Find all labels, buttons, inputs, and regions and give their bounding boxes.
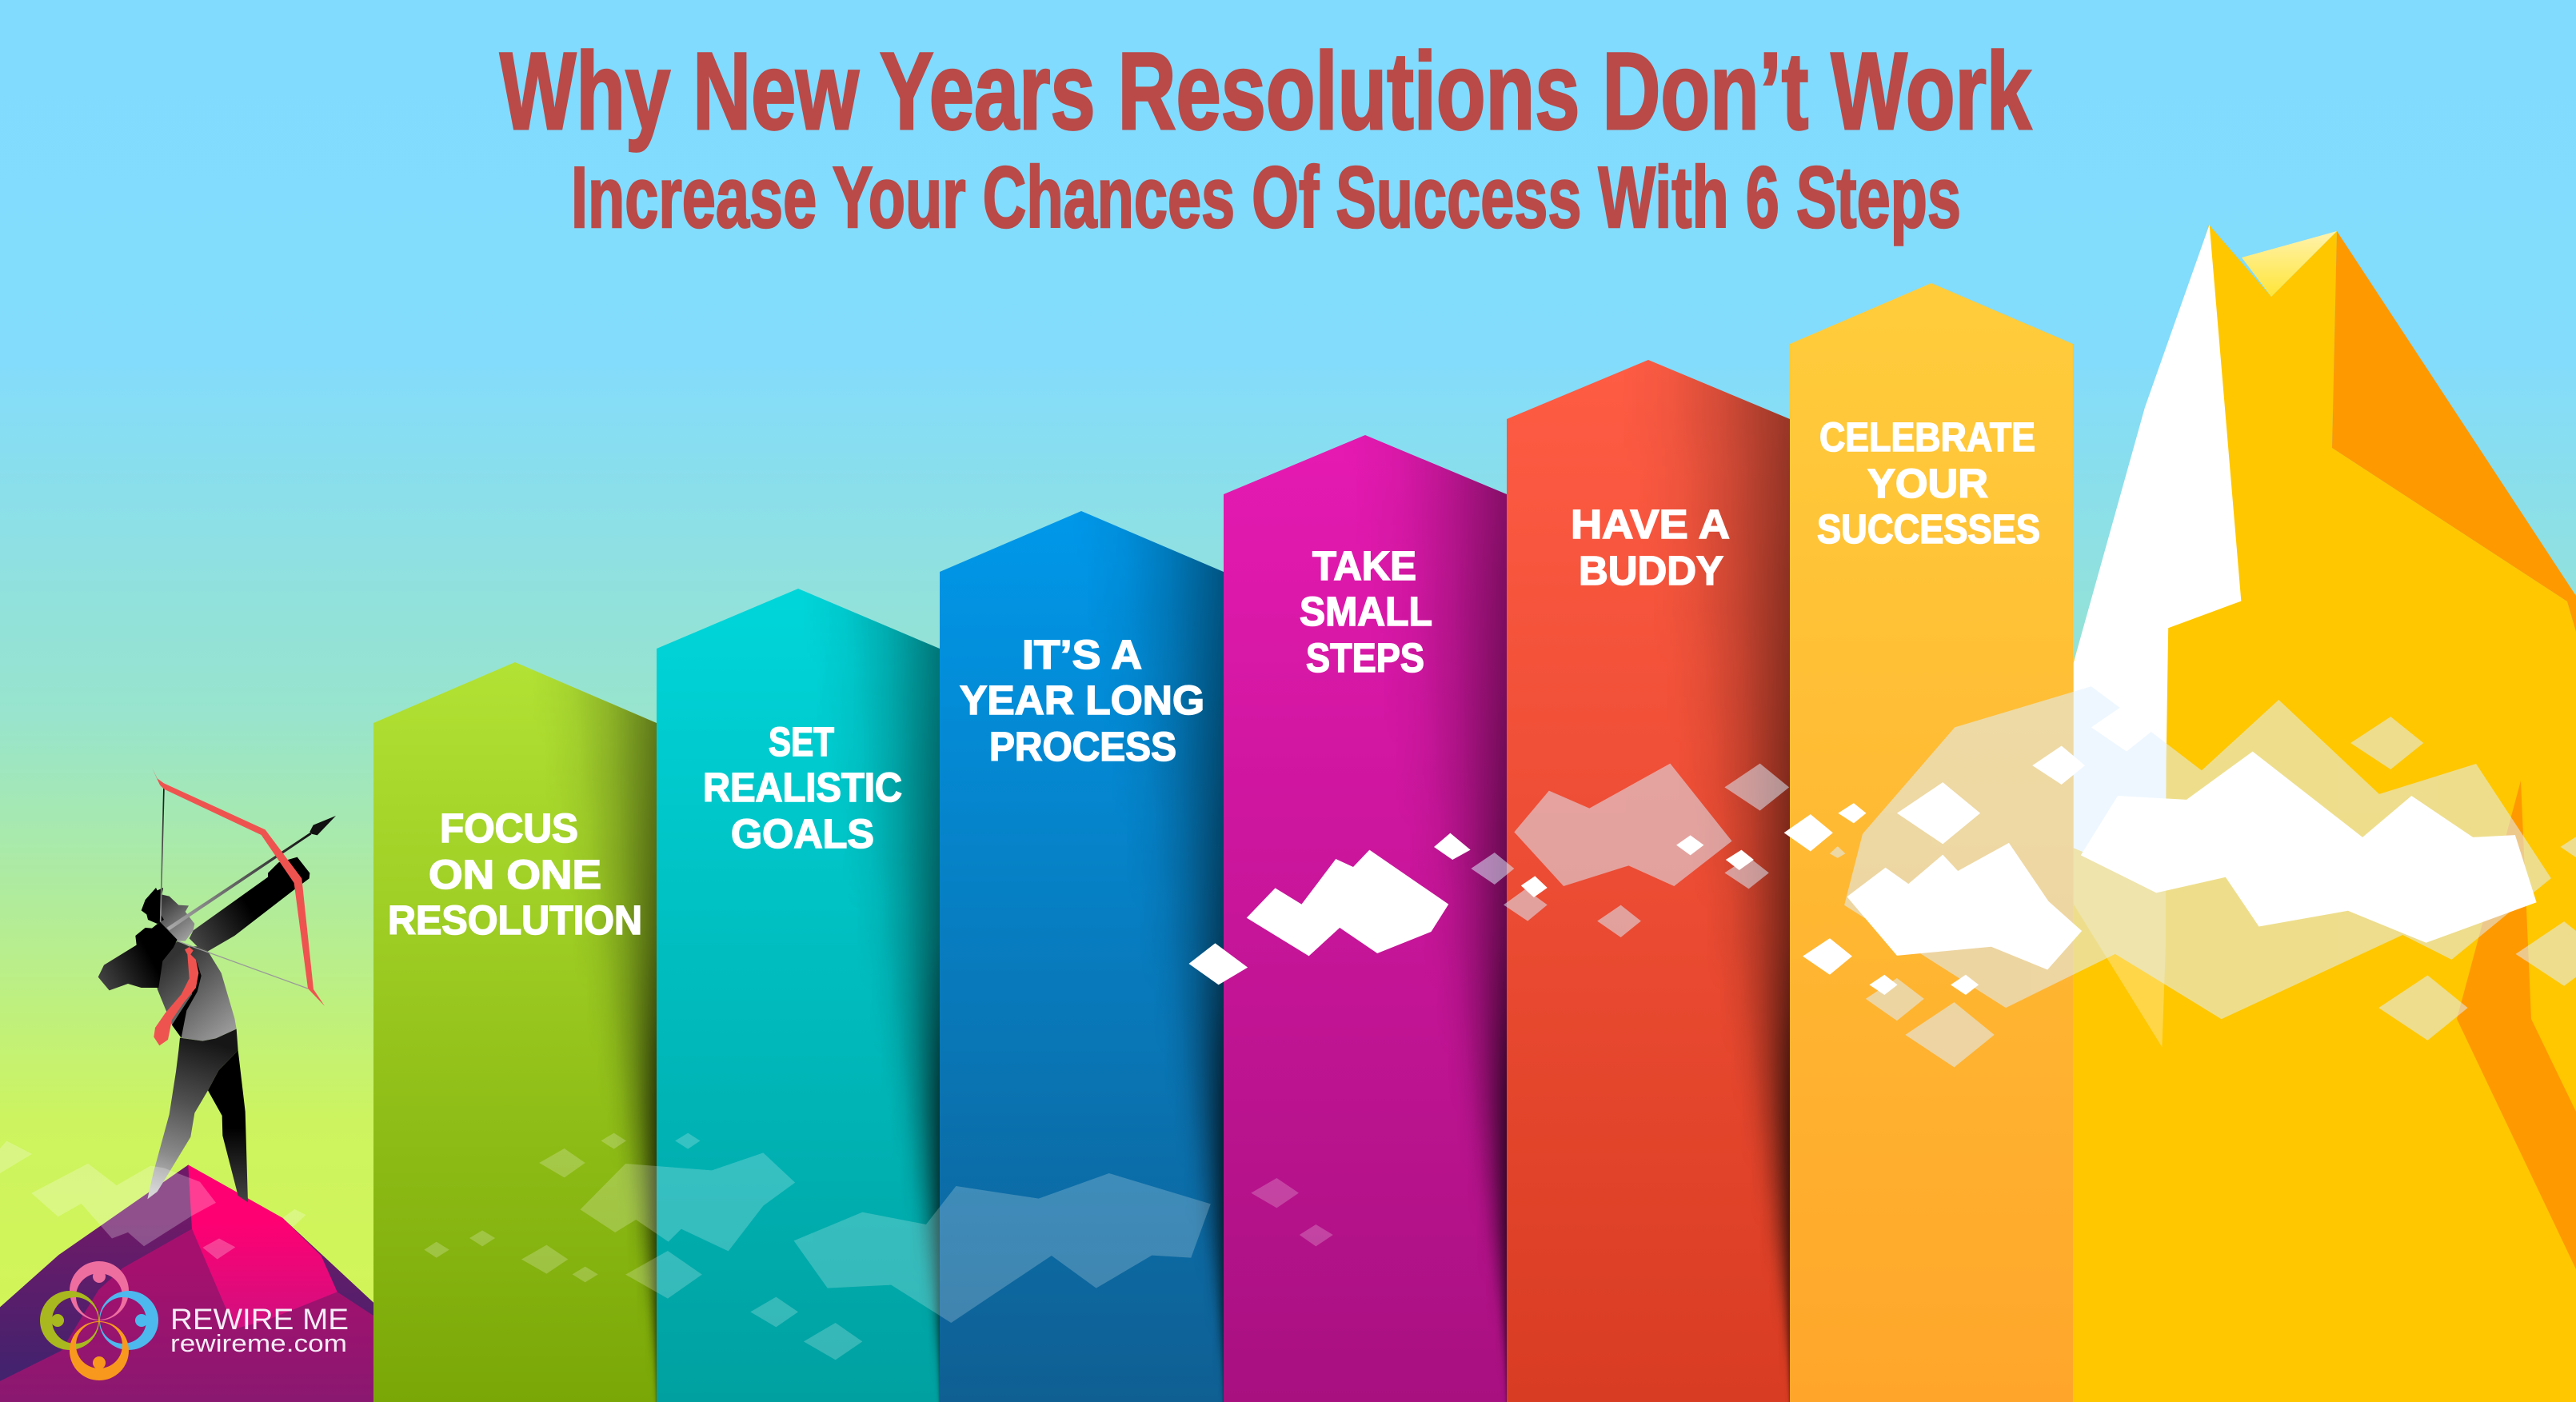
main title: Why New Years Resolutions Don’t Work (500, 30, 2032, 153)
white cloud and diamonds (1188, 833, 1754, 985)
translucent mist on the summit (0, 1141, 306, 1260)
translucent cloud and diamonds (1471, 764, 1789, 937)
step label: have a buddy: HAVE A (1571, 501, 1730, 547)
step label: focus on one resolution (388, 805, 642, 943)
faint clouds on columns 1 to 4 (424, 1133, 1333, 1360)
title block (500, 30, 2032, 246)
step label: have a buddy: BUDDY (1579, 548, 1723, 593)
tie (154, 947, 198, 1045)
magenta lower facet (0, 1228, 374, 1402)
drawing arm (98, 922, 178, 990)
head and hair (157, 894, 194, 941)
step label: take small steps: STEPS (1306, 635, 1424, 681)
torso (158, 941, 237, 1041)
logo ring blue (99, 1291, 158, 1350)
column 1 (373, 662, 657, 1402)
archer businessman with bow (98, 768, 336, 1202)
logo: Rewire Me (40, 1261, 349, 1380)
step label: it's a year long process: YEAR LONG (960, 677, 1204, 723)
logo ring orange (70, 1321, 129, 1380)
mountain body (2073, 225, 2576, 1402)
column 4 (1224, 435, 1507, 1402)
step label: celebrate your successes: YOUR (1867, 461, 1988, 506)
arrow (166, 816, 336, 930)
logo ring green (40, 1291, 99, 1350)
right mountain (2073, 225, 2576, 1402)
step label: it's a year long process (960, 632, 1204, 769)
step columns (373, 240, 2073, 1402)
step label: celebrate your successes (1817, 414, 2040, 552)
bow strings (161, 785, 308, 989)
white clouds (1784, 746, 2537, 995)
step label: set realistic goals: REALISTIC (703, 765, 902, 810)
step label: focus on one resolution: RESOLUTION (388, 897, 642, 943)
step label: take small steps: TAKE (1312, 543, 1416, 589)
bow (152, 768, 325, 1006)
purple back facet (0, 1165, 373, 1402)
white snow face (2074, 225, 2241, 887)
step label: focus on one resolution: ON ONE (429, 852, 601, 897)
subtitle: Increase Your Chances Of Success With 6 Steps (571, 149, 1961, 246)
step label: celebrate your successes: CELEBRATE (1819, 414, 2035, 460)
left mountain (0, 1165, 374, 1402)
step label: set realistic goals (703, 719, 902, 857)
column 3 (940, 511, 1224, 1402)
logo url: rewireme.com (170, 1329, 347, 1357)
clouds on columns 4 and 5 (1188, 764, 1789, 985)
logo ring pink (70, 1261, 129, 1320)
rear leg (208, 1050, 248, 1202)
snow-lit facet (2242, 231, 2337, 297)
step label: it's a year long process: IT’S A (1022, 632, 1142, 677)
pink summit facet (188, 1165, 337, 1329)
shadow under tie (172, 960, 202, 1038)
step label: celebrate your successes: SUCCESSES (1817, 506, 2040, 552)
column 2 (657, 589, 940, 1402)
logo wordmark: REWIRE ME (170, 1303, 349, 1336)
column 5 (1507, 360, 1790, 1402)
step label: set realistic goals: SET (769, 719, 834, 765)
extended arm (190, 857, 310, 951)
faint snow base (2074, 848, 2166, 1047)
column 6 (1790, 283, 2073, 1402)
front leg (147, 1029, 238, 1199)
lower orange ridge (2457, 781, 2576, 1269)
translucent clouds (1830, 686, 2576, 1068)
step label: take small steps (1300, 543, 1432, 681)
clouds across columns 5, 6 and mountain (1784, 686, 2576, 1068)
step label: set realistic goals: GOALS (731, 811, 874, 857)
step label: take small steps: SMALL (1300, 589, 1432, 634)
step label: have a buddy (1571, 501, 1730, 593)
step label: it's a year long process: PROCESS (989, 724, 1176, 769)
orange shaded face (2332, 231, 2576, 632)
step label: focus on one resolution: FOCUS (440, 805, 578, 851)
